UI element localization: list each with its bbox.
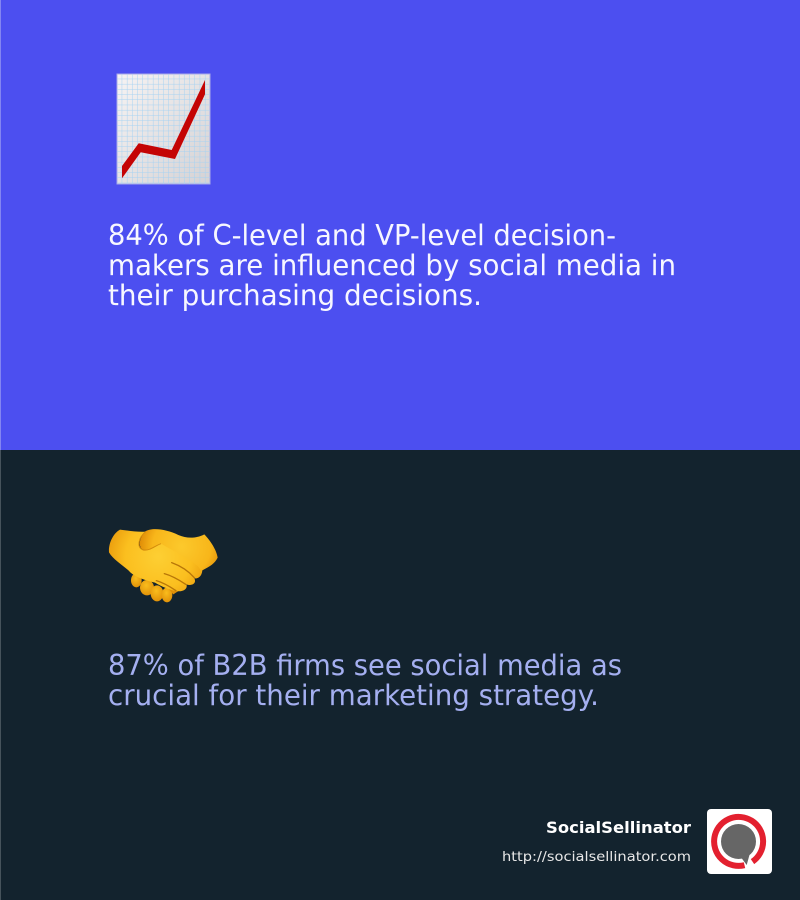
text: top statistic: their purchasing decisions. [108,279,482,312]
icon: handshake [109,529,218,602]
text: bottom statistic: crucial for their marketing strategy. [108,679,599,712]
text: top statistic: 84% of C-level and VP-level decision- [108,219,616,252]
text: brand URL: http://socialsellinator.com [502,849,691,865]
text: bottom statistic [108,649,622,712]
panel: top statistic background [0,0,800,450]
text: bottom statistic: 87% of B2B firms see social media as [108,649,622,682]
panel: bottom statistic background [0,450,800,900]
text: brand name: SocialSellinator [546,818,691,837]
text: top statistic: makers are influenced by social media in [108,249,676,282]
text: top statistic [108,219,676,312]
icon: chart trending upward [117,74,210,184]
icon: SocialSellinator logo [707,809,772,874]
